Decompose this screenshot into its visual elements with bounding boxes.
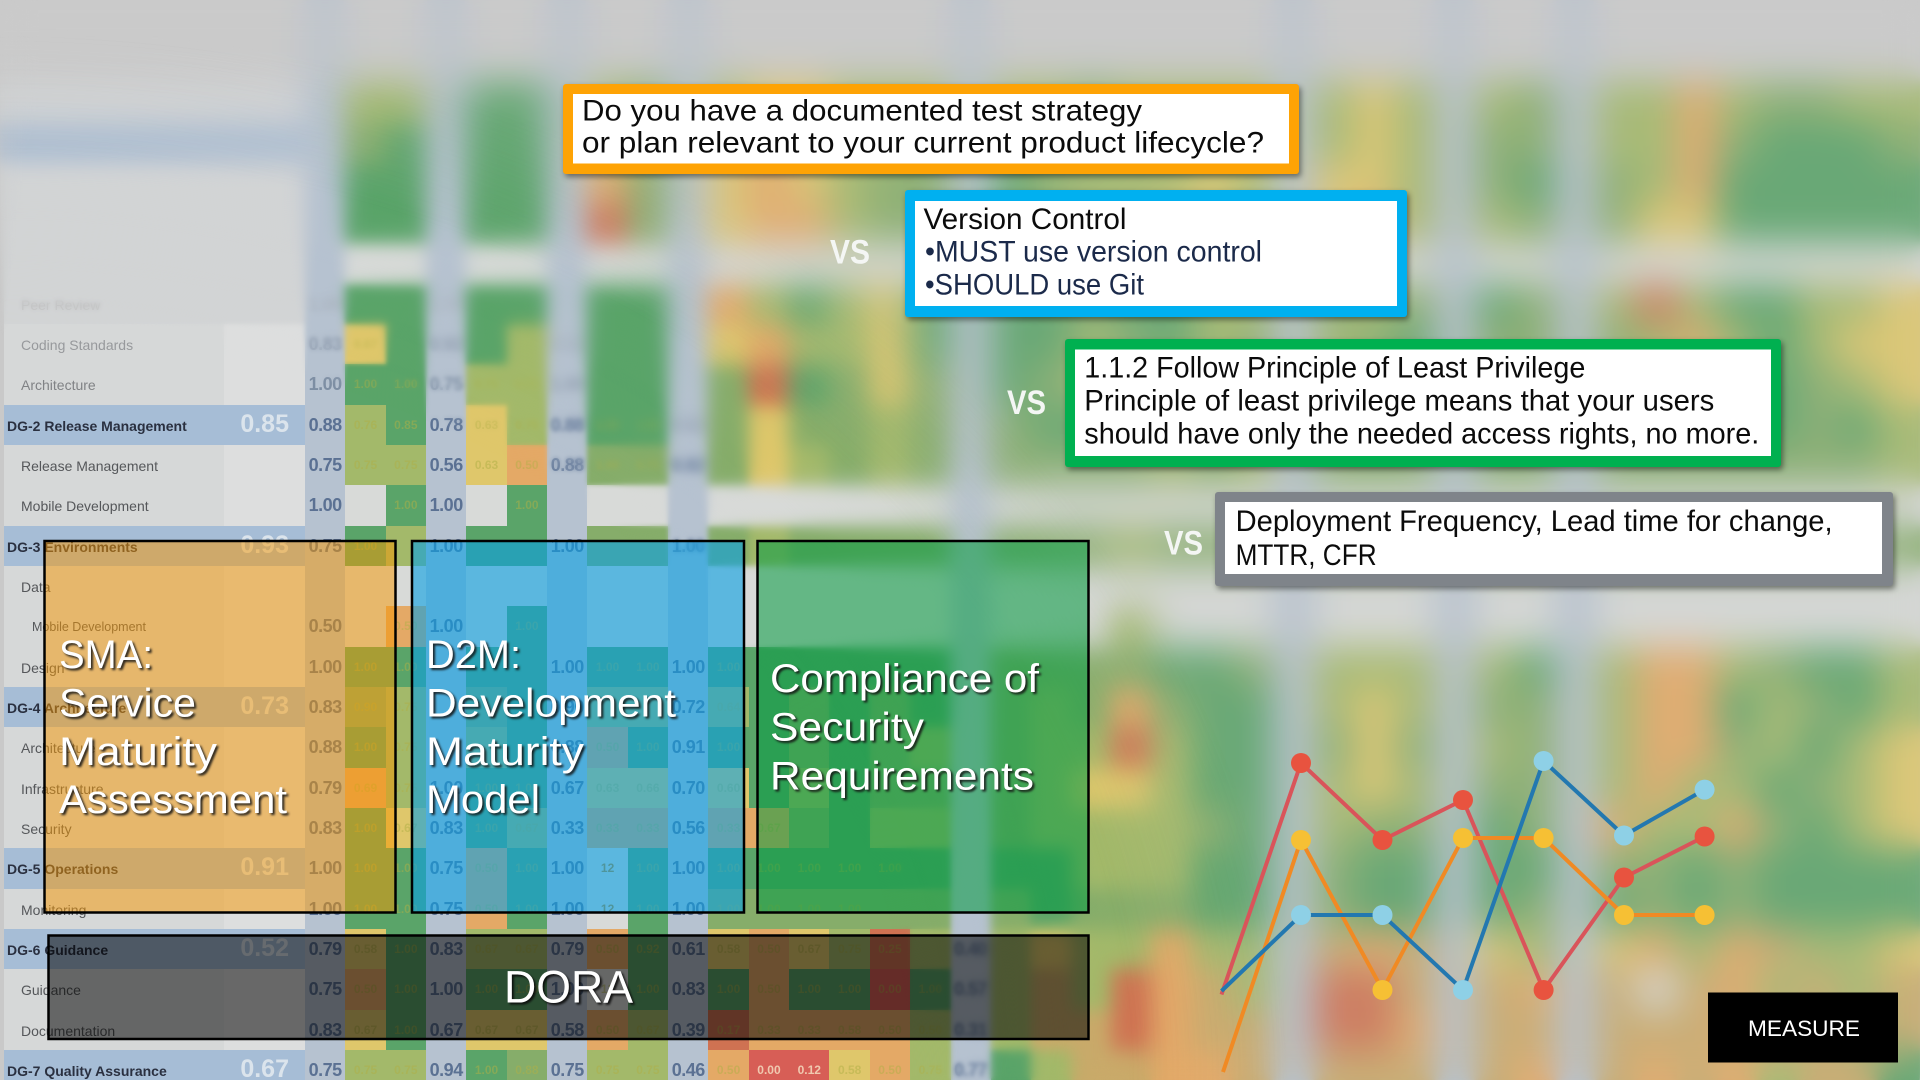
blurred heatmap table background: 1.00 — [717, 902, 740, 916]
blurred heatmap table background: 1.00 — [596, 418, 619, 432]
blurred heatmap table background: 0.88 — [551, 737, 584, 757]
blurred heatmap table background: 1.00 — [394, 902, 418, 916]
blurred heatmap table background: 1.00 — [551, 374, 584, 394]
blurred heatmap table background: 0.75 — [919, 1063, 942, 1077]
blurred heatmap table background: 1.00 — [430, 536, 463, 556]
blurred heatmap table background: DG-2 Release Management — [7, 418, 187, 434]
blurred heatmap table background: 0.67 — [354, 337, 377, 351]
blurred heatmap table background: 0.94 — [430, 1060, 463, 1080]
heading: D2M Development Maturity Model: Maturity — [426, 730, 584, 774]
blurred heatmap table background: Monitoring — [21, 902, 86, 918]
blurred heatmap table background: 0.83 — [430, 939, 463, 959]
blurred heatmap table background: 0.67 — [394, 821, 418, 835]
heading: SMA Service Maturity Assessment — [59, 633, 287, 822]
blurred heatmap table background: 1.00 — [672, 899, 705, 919]
blurred heatmap table background: 1.00 — [475, 982, 498, 996]
blurred heatmap table background: 1.00 — [596, 458, 619, 472]
blurred heatmap table background: 0.67 — [430, 1020, 463, 1040]
blurred heatmap table background: 0.76 — [354, 418, 377, 432]
blurred heatmap table background: Peer Review — [21, 297, 100, 313]
blurred heatmap table background: 0.50 — [309, 616, 342, 636]
blurred heatmap table background: Security — [21, 821, 72, 837]
blurred heatmap table background: 0.64 — [717, 700, 740, 714]
blurred heatmap table background: 1.00 — [309, 374, 342, 394]
blurred heatmap table background: 1.00 — [309, 657, 342, 677]
blurred heatmap table background: 0.50 — [475, 861, 498, 875]
callout: least privilege: 1.1.2 Follow Principle of Least Privilege — [1084, 352, 1585, 385]
blurred heatmap table background: 1.00 — [394, 942, 418, 956]
blurred heatmap table background: 1.00 — [354, 861, 377, 875]
heading: SMA Service Maturity Assessment: Service — [59, 682, 196, 726]
blurred heatmap table background: 0.60 — [717, 781, 740, 795]
blurred heatmap table background: 1.00 — [394, 377, 418, 391]
blurred heatmap table background: 1.00 — [309, 899, 342, 919]
blurred heatmap table background: 1.00 — [838, 982, 861, 996]
blurred heatmap table background: 0.50 — [354, 982, 377, 996]
blurred heatmap table background: 0.31 — [954, 1020, 987, 1040]
series: orange — [1223, 828, 1715, 1072]
blurred heatmap table background: 0.72 — [672, 697, 705, 717]
heading: D2M Development Maturity Model: Model — [426, 778, 540, 822]
blurred heatmap table background: DG-6 Guidance — [7, 942, 108, 958]
blurred heatmap table background: 1.00 — [636, 660, 660, 674]
blurred heatmap table background: 0.90 — [354, 700, 377, 714]
blurred heatmap table background: 1.00 — [798, 861, 821, 875]
blurred heatmap table background: 1.00 — [394, 660, 418, 674]
blurred heatmap table background: 0.75 — [515, 377, 539, 391]
panel: D2M — [412, 541, 744, 912]
blurred heatmap table background: 1.00 — [636, 982, 660, 996]
blurred heatmap table background: 0.91 — [240, 853, 289, 881]
blurred heatmap table background: 0.75 — [596, 1063, 619, 1077]
blurred heatmap table background: Mobile Development — [32, 620, 146, 634]
blurred heatmap table background: 0.67 — [515, 942, 539, 956]
blurred heatmap table background: 0.75 — [636, 458, 660, 472]
panel: DORA — [48, 936, 1088, 1039]
blurred heatmap table background: 0.58 — [838, 1023, 861, 1037]
blurred heatmap table background: 0.83 — [309, 818, 342, 838]
heading: SMA Service Maturity Assessment: Assessment — [59, 778, 287, 822]
heading: D2M Development Maturity Model: D2M: — [426, 633, 521, 677]
blurred heatmap table background: Infrastructure — [21, 781, 103, 797]
line chart — [1222, 751, 1715, 1072]
blurred heatmap table background: 0.50 — [878, 1063, 902, 1077]
badge: MEASURE — [1708, 992, 1898, 1062]
blurred heatmap table background: 1.00 — [551, 899, 584, 919]
blurred heatmap table background: 0.75 — [394, 1063, 418, 1077]
callout: least privilege — [1065, 339, 1781, 467]
blurred heatmap table background: 1.00 — [551, 979, 584, 999]
blurred heatmap table background: DG-3 Environments — [7, 539, 138, 555]
blurred heatmap table background: 0.75 — [430, 899, 463, 919]
callout: test strategy question — [563, 84, 1299, 174]
blurred heatmap table background: Guidance — [21, 982, 81, 998]
blurred heatmap table background: 0.61 — [672, 939, 705, 959]
blurred heatmap table background: 0.33 — [596, 821, 619, 835]
heading: Compliance of Security Requirements: Security — [770, 706, 924, 750]
blurred heatmap table background: 0.88 — [309, 737, 342, 757]
heading: SMA Service Maturity Assessment: SMA: — [59, 633, 153, 677]
blurred heatmap table background: 1.00 — [717, 861, 740, 875]
heading: D2M Development Maturity Model: Development — [426, 682, 676, 726]
blurred heatmap table background: 0.00 — [878, 982, 902, 996]
callout: least privilege: should have only the needed access rights, no more. — [1084, 418, 1759, 450]
blurred heatmap table background: 1.00 — [430, 616, 463, 636]
blurred heatmap table background: 0.83 — [309, 334, 342, 354]
blurred heatmap table background: 1.00 — [798, 982, 821, 996]
heading: DORA: DORA — [504, 962, 633, 1012]
blurred heatmap table background: 0.70 — [672, 778, 705, 798]
blurred heatmap table background: 0.67 — [515, 821, 539, 835]
blurred heatmap table background: 1.00 — [672, 858, 705, 878]
blurred heatmap table background: 0.63 — [596, 781, 619, 795]
blurred heatmap table background: 1.00 — [430, 979, 463, 999]
blurred heatmap table background: 0.67 — [636, 1023, 660, 1037]
blurred heatmap table background: 0.33 — [551, 818, 584, 838]
blurred heatmap table background: 1.00 — [309, 294, 342, 314]
blurred heatmap table background: 1.00 — [515, 861, 539, 875]
blurred heatmap table background: 1.00 — [354, 740, 377, 754]
blurred heatmap table background: 0.33 — [636, 821, 660, 835]
blurred heatmap table background: 0.56 — [430, 455, 463, 475]
panel: SMA — [44, 541, 396, 912]
blurred heatmap table background: 0.58 — [838, 1063, 861, 1077]
blurred heatmap table background: 0.33 — [757, 1023, 781, 1037]
blurred heatmap table background: 0.83 — [430, 818, 463, 838]
blurred heatmap table background: 0.78 — [430, 415, 463, 435]
blurred heatmap table background: 0.75 — [551, 1060, 584, 1080]
blurred heatmap table background: Documentation — [21, 1023, 115, 1039]
blurred heatmap table background: 1.00 — [636, 418, 660, 432]
blurred heatmap table background: 1.00 — [636, 861, 660, 875]
blurred heatmap table background: 0.75 — [430, 858, 463, 878]
blurred heatmap table background: 1.00 — [354, 821, 377, 835]
blurred heatmap table background: 1.00 — [717, 660, 740, 674]
blurred heatmap table background: 1.00 — [394, 498, 418, 512]
blurred heatmap table background: 1.00 — [394, 982, 418, 996]
blurred heatmap table background: 0.50 — [757, 982, 781, 996]
blurred heatmap table background: 0.83 — [309, 1020, 342, 1040]
blurred heatmap table background: DG-7 Quality Assurance — [7, 1063, 167, 1079]
blurred heatmap table background: 0.75 — [515, 418, 539, 432]
badge: MEASURE: MEASURE — [1748, 1016, 1860, 1041]
blurred heatmap table background: 1.00 — [551, 858, 584, 878]
blurred heatmap table background: 0.83 — [672, 979, 705, 999]
blurred heatmap table background: 0.67 — [515, 1023, 539, 1037]
blurred heatmap table background: 0.57 — [954, 979, 987, 999]
blurred heatmap table background: 0.50 — [596, 740, 619, 754]
blurred heatmap table background: Architecture — [21, 740, 96, 756]
label: vs 2: VS — [1007, 384, 1046, 422]
blurred heatmap table background: Design — [21, 660, 65, 676]
blurred heatmap table background: 0.75 — [394, 458, 418, 472]
blurred heatmap table background: Coding Standards — [21, 337, 133, 353]
callout: version control: •SHOULD use Git — [925, 268, 1145, 301]
blurred heatmap table background: 0.92 — [551, 334, 584, 354]
blurred heatmap table background: 0.50 — [757, 942, 781, 956]
blurred heatmap table background: 12 — [601, 902, 614, 916]
blurred heatmap table background: 0.39 — [672, 1020, 705, 1040]
blurred heatmap table background: 1.00 — [515, 619, 539, 633]
blurred heatmap table background: 0.75 — [309, 1060, 342, 1080]
blurred heatmap table background: 0.50 — [596, 1023, 619, 1037]
blurred heatmap table background: DG-4 Architecture — [7, 700, 126, 716]
blurred heatmap table background: 0.50 — [878, 1023, 902, 1037]
callout: version control — [905, 190, 1407, 317]
blurred heatmap table background: 1.00 — [354, 539, 377, 553]
blurred heatmap table background: 1.00 — [551, 657, 584, 677]
heading: Compliance of Security Requirements — [770, 657, 1040, 798]
blurred heatmap table background: 1.00 — [838, 861, 861, 875]
callout: version control: Version Control — [924, 203, 1126, 236]
blurred heatmap table background: 0.92 — [430, 334, 463, 354]
blurred heatmap table background: 0.73 — [240, 692, 289, 720]
blurred heatmap table background: 0.33 — [717, 821, 740, 835]
blurred heatmap table background: 0.82 — [672, 415, 705, 435]
blurred heatmap table background: Architecture — [21, 377, 96, 393]
blurred heatmap table background: Mobile Development — [21, 498, 149, 514]
blurred heatmap table background: 0.75 — [309, 455, 342, 475]
blurred heatmap table background: 12 — [601, 982, 614, 996]
blurred heatmap table background: 0.67 — [757, 821, 781, 835]
callout: DORA metrics: Deployment Frequency, Lead time for change, — [1236, 505, 1833, 538]
blurred heatmap table background: 0.25 — [878, 942, 902, 956]
blurred heatmap table background: 1.00 — [515, 498, 539, 512]
blurred heatmap table background: 0.67 — [475, 1023, 498, 1037]
blurred heatmap table background: 1.00 — [430, 495, 463, 515]
label: vs 3: VS — [1164, 524, 1203, 562]
blurred heatmap table background: 0.85 — [240, 410, 289, 438]
blurred heatmap table background: 0.67 — [475, 942, 498, 956]
blurred heatmap table background: 0.75 — [354, 1063, 377, 1077]
blurred heatmap table background: 1.00 — [919, 982, 942, 996]
blurred heatmap table background: 0.63 — [475, 418, 498, 432]
blurred heatmap table background: 0.00 — [757, 1063, 781, 1077]
blurred heatmap table background: 0.75 — [309, 536, 342, 556]
blurred heatmap table background: 0.75 — [354, 458, 377, 472]
series: red — [1222, 753, 1715, 1000]
blurred heatmap table background: 0.93 — [240, 531, 289, 559]
blurred heatmap table background: 1.00 — [636, 902, 660, 916]
blurred heatmap table background: 1.00 — [717, 982, 740, 996]
callout: version control: •MUST use version control — [925, 236, 1262, 269]
blurred heatmap table background: 0.67 — [354, 1023, 377, 1037]
blurred heatmap table background: 1.00 — [672, 657, 705, 677]
blurred heatmap table background: 1.00 — [354, 902, 377, 916]
blurred heatmap table background: Data — [21, 579, 51, 595]
blurred heatmap table background: 0.75 — [475, 377, 498, 391]
callout: test strategy question: or plan relevant to your current product lifecycle? — [582, 126, 1264, 160]
blurred heatmap table background: 0.88 — [309, 415, 342, 435]
blurred heatmap table background: 1.00 — [596, 660, 619, 674]
blurred heatmap table background: 0.12 — [798, 1063, 821, 1077]
blurred heatmap table background: 0.50 — [394, 619, 418, 633]
blurred heatmap table background: 1.00 — [475, 1063, 498, 1077]
blurred heatmap table background: 0.82 — [672, 455, 705, 475]
blurred heatmap table background: 0.56 — [672, 818, 705, 838]
blurred heatmap table background: 1.00 — [515, 902, 539, 916]
blurred heatmap table background: 1.00 — [757, 902, 781, 916]
blurred heatmap table background: 0.67 — [551, 778, 584, 798]
panel: compliance of security requirements — [758, 541, 1088, 912]
blurred heatmap table background: 1.00 — [636, 740, 660, 754]
blurred heatmap table background: 0.75 — [394, 781, 418, 795]
blurred heatmap table background: 1.00 — [798, 902, 821, 916]
blurred heatmap table background: 12 — [601, 861, 614, 875]
blurred heatmap table background: 1.00 — [551, 536, 584, 556]
callout: DORA metrics — [1215, 492, 1893, 586]
blurred heatmap table background: 0.85 — [394, 418, 418, 432]
blurred heatmap table background: 0.91 — [672, 737, 705, 757]
blurred heatmap table background: 0.58 — [717, 942, 740, 956]
blurred heatmap table background: 0.69 — [354, 781, 377, 795]
blurred heatmap table background: Release Management — [21, 458, 158, 474]
blurred heatmap table background: 0.33 — [798, 1023, 821, 1037]
blurred heatmap table background: 0.88 — [515, 1063, 539, 1077]
blurred heatmap table background: 0.67 — [798, 942, 821, 956]
blurred heatmap table background: 0.88 — [551, 415, 584, 435]
blurred heatmap table background: 1.00 — [515, 982, 539, 996]
blurred heatmap table background: 0.75 — [636, 1063, 660, 1077]
blurred heatmap table background: 1.00 — [430, 778, 463, 798]
blurred heatmap table background: 0.79 — [309, 939, 342, 959]
blurred heatmap table background: 1.00 — [394, 1023, 418, 1037]
blurred heatmap table background: 0.75 — [838, 942, 861, 956]
blurred heatmap table background: 0.75 — [394, 700, 418, 714]
blurred heatmap table background: 0.46 — [672, 1060, 705, 1080]
blurred heatmap table background: 0.79 — [309, 778, 342, 798]
heading: Compliance of Security Requirements: Requirements — [770, 754, 1034, 798]
blurred heatmap table background: 0.75 — [394, 740, 418, 754]
blurred heatmap table background: 1.00 — [717, 740, 740, 754]
blurred heatmap table background: 0.63 — [475, 458, 498, 472]
callout: test strategy question: Do you have a documented test strategy — [582, 94, 1142, 128]
label: vs 1: VS — [830, 234, 870, 272]
callout: DORA metrics: MTTR, CFR — [1236, 539, 1377, 572]
blurred heatmap table background: 0.77 — [954, 1060, 987, 1080]
heading: D2M Development Maturity Model — [426, 633, 676, 822]
blurred heatmap table background: 0.79 — [551, 939, 584, 959]
blurred heatmap table background: 0.75 — [309, 979, 342, 999]
blurred heatmap table background: 1.00 — [672, 536, 705, 556]
heading: SMA Service Maturity Assessment: Maturity — [59, 730, 217, 774]
blurred heatmap table background: 0.40 — [954, 939, 987, 959]
blurred heatmap table background: 1.00 — [309, 858, 342, 878]
blurred heatmap table background: 0.66 — [636, 781, 660, 795]
blurred heatmap table background: 1.00 — [394, 861, 418, 875]
blurred heatmap table background: 0.92 — [636, 942, 660, 956]
blurred heatmap table background: 1.00 — [354, 377, 377, 391]
blurred heatmap table background: 0.83 — [309, 697, 342, 717]
blurred heatmap table background: 0.17 — [717, 1023, 740, 1037]
blurred heatmap table background: 0.52 — [240, 934, 289, 962]
series: blue — [1222, 751, 1715, 1000]
blurred heatmap table background: 1.00 — [475, 781, 498, 795]
blurred heatmap table background: 0.58 — [354, 942, 377, 956]
blurred heatmap table background: 1.00 — [757, 861, 781, 875]
blurred heatmap table background: 0.75 — [430, 374, 463, 394]
blurred heatmap table background: 1.00 — [838, 902, 861, 916]
blurred heatmap table background: DG-5 Operations — [7, 861, 118, 877]
callout: least privilege: Principle of least privilege means that your users — [1084, 384, 1714, 418]
blurred heatmap table background: 0.88 — [551, 455, 584, 475]
blurred heatmap table background: 0.50 — [717, 1063, 740, 1077]
blurred heatmap table background: 0.50 — [515, 458, 539, 472]
blurred heatmap table background: 0.58 — [551, 1020, 584, 1040]
blurred heatmap table background: 1.00 — [430, 294, 463, 314]
blurred heatmap table background: 0.50 — [919, 1023, 942, 1037]
blurred heatmap table background: 1.00 — [354, 660, 377, 674]
blurred heatmap table background: 1.00 — [475, 821, 498, 835]
blurred heatmap table background: 1.00 — [878, 861, 902, 875]
blurred heatmap table background: 0.50 — [475, 902, 498, 916]
heading: Compliance of Security Requirements: Compliance of — [770, 657, 1040, 701]
blurred heatmap table background: 0.50 — [596, 942, 619, 956]
blurred heatmap table background: 0.90 — [551, 697, 584, 717]
blurred heatmap table background: 1.00 — [515, 781, 539, 795]
blurred heatmap table background: 1.00 — [309, 495, 342, 515]
